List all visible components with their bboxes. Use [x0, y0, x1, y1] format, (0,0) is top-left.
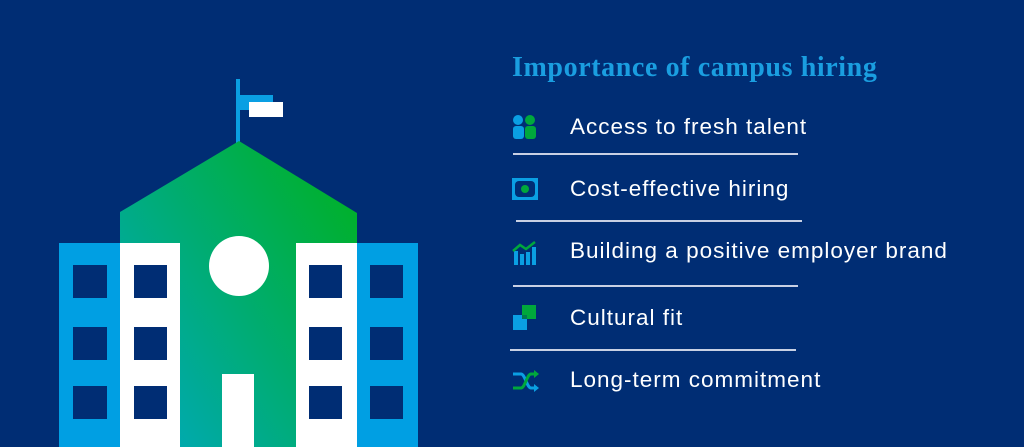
text: item 1: Access to fresh talent [570, 114, 807, 139]
text: item 2: Cost-effective hiring [570, 176, 789, 201]
text: item 4: Cultural fit [570, 305, 683, 330]
text: item 3: Building a positive employer brand [570, 238, 948, 263]
illustration: school building [59, 79, 418, 447]
title: Importance of campus hiring [512, 52, 877, 83]
flag [236, 79, 283, 143]
text: item 5: Long-term commitment [570, 367, 821, 392]
icon: shuffle [513, 370, 539, 392]
icon: growth [512, 241, 536, 265]
central body [120, 141, 357, 447]
wings [59, 243, 418, 447]
icon: money [512, 178, 538, 200]
icon: squares [513, 305, 536, 330]
icon: people [513, 115, 536, 139]
